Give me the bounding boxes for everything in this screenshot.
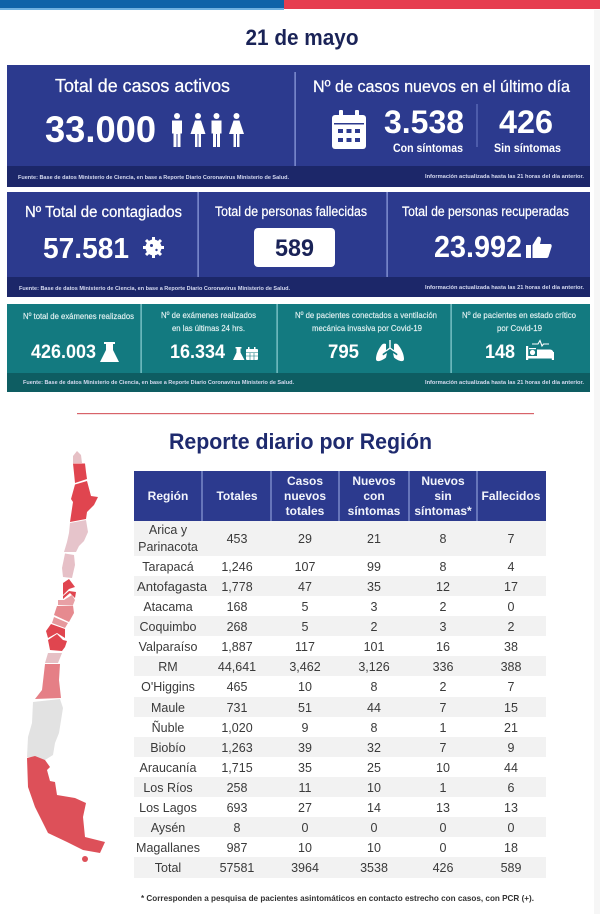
icon: people — [172, 113, 244, 147]
region: Araucania — [48, 634, 67, 651]
row: Maule: 15 — [504, 701, 518, 715]
number: examenes 24 hrs: 16.334 — [170, 342, 225, 363]
number: ventilacion: 795 — [328, 342, 359, 363]
table header: Región — [148, 489, 188, 503]
label: sin sintomas: Sin síntomas — [494, 141, 561, 155]
row: Magallanes: 0 — [440, 841, 447, 855]
row: Valparaiso: 1,887 — [221, 640, 253, 654]
row: Arica y Parinacota — [138, 523, 515, 554]
table header: nuevos — [284, 489, 326, 503]
icon: lungs — [376, 340, 404, 361]
row: Tarapaca: Tarapacá — [142, 560, 194, 574]
region: Coquimbo — [62, 554, 75, 578]
panel: examenes y pacientes — [7, 304, 590, 392]
top bar — [0, 0, 600, 10]
row: Magallanes — [136, 841, 518, 855]
label: ventilacion: Nº de pacientes conectados a ventilación — [295, 310, 437, 320]
row: O'Higgins: 8 — [371, 680, 378, 694]
row: Los Lagos — [139, 801, 518, 815]
row: Maule: 51 — [298, 701, 312, 715]
row: Araucania — [140, 761, 518, 775]
panel: casos activos y nuevos — [7, 65, 590, 187]
row: Antofagasta: 17 — [504, 580, 518, 594]
row: Biobio: 1,263 — [221, 741, 253, 755]
row: Araucania: 44 — [504, 761, 518, 775]
region: RM — [63, 591, 76, 599]
row: Araucania: 25 — [367, 761, 381, 775]
icon: small flask — [233, 347, 244, 360]
number: total examenes: 426.003 — [31, 342, 96, 363]
row: RM: 44,641 — [218, 660, 256, 674]
row: RM: 3,126 — [358, 660, 390, 674]
row: Los Lagos: 14 — [367, 801, 381, 815]
row: Arica y Parinacota: 453 — [227, 532, 247, 546]
row: O'Higgins: 10 — [298, 680, 312, 694]
row: Total: 426 — [433, 861, 453, 875]
row: Aysen — [151, 821, 515, 835]
row: RM: 336 — [433, 660, 453, 674]
source note: Fuente: Base de datos Ministerio de Ciencia, en base a Reporte Diario Coronavirus Ministerio de Salud. — [18, 175, 289, 181]
row: Los Lagos: 13 — [504, 801, 518, 815]
region: Atacama — [64, 520, 88, 552]
row: Tarapaca — [142, 560, 515, 574]
row: Valparaiso: 101 — [364, 640, 384, 654]
number: con sintomas: 3.538 — [384, 104, 464, 140]
table header — [134, 471, 546, 521]
footnote: * Corresponden a pesquisa de pacientes asintomáticos en contacto estrecho con casos, con PCR (+). — [141, 893, 534, 903]
row: Tarapaca: 8 — [440, 560, 447, 574]
number box: fallecidas — [254, 228, 335, 267]
row: Los Lagos: Los Lagos — [139, 801, 197, 815]
row: RM: 388 — [501, 660, 521, 674]
row: O'Higgins: O'Higgins — [141, 680, 195, 694]
row: O'Higgins: 7 — [508, 680, 515, 694]
row: Nuble: 21 — [504, 721, 518, 735]
label: con sintomas: Con síntomas — [393, 141, 463, 155]
row: Tarapaca: 4 — [508, 560, 515, 574]
update note: Información actualizada hasta las 21 horas del día anterior. — [425, 285, 584, 291]
row: RM: 3,462 — [289, 660, 321, 674]
row: Magallanes: 18 — [504, 841, 518, 855]
row: Antofagasta: Antofagasta — [137, 580, 207, 594]
row: Arica y Parinacota: 21 — [367, 532, 381, 546]
region: Los Lagos — [35, 664, 61, 699]
row: Araucania: 1,715 — [221, 761, 253, 775]
table header: síntomas — [348, 504, 401, 518]
update note: Información actualizada hasta las 21 horas del día anterior. — [425, 380, 584, 386]
table header: Fallecidos — [482, 489, 541, 503]
row: Arica y Parinacota: Arica y — [149, 523, 188, 537]
row: Coquimbo — [140, 620, 515, 634]
region: Los Rios — [45, 653, 62, 663]
row: Valparaiso — [139, 640, 518, 654]
region: Nuble — [52, 617, 68, 628]
row: Coquimbo: 268 — [227, 620, 247, 634]
row: Maule: 731 — [227, 701, 247, 715]
row: RM — [158, 660, 521, 674]
row: Antofagasta: 47 — [298, 580, 312, 594]
row: Aysen: 0 — [302, 821, 309, 835]
label: estado critico: por Covid-19 — [497, 323, 542, 333]
row: Nuble: Ñuble — [152, 721, 184, 735]
row: Maule — [151, 701, 518, 715]
table header: síntomas* — [414, 504, 472, 518]
icon: virus — [143, 237, 164, 258]
row: O'Higgins: 465 — [227, 680, 247, 694]
row: Coquimbo: Coquimbo — [140, 620, 197, 634]
region: Magallanes — [27, 756, 105, 853]
row: Magallanes: 10 — [367, 841, 381, 855]
row: RM: RM — [158, 660, 178, 674]
icon: thumbs up — [526, 237, 552, 258]
table header: totales — [286, 504, 325, 518]
row: Antofagasta: 12 — [436, 580, 450, 594]
row: Biobio: Biobío — [150, 741, 186, 755]
region: Maule — [54, 606, 74, 622]
row: Total: 57581 — [220, 861, 254, 875]
heading: recuperadas: Total de personas recuperadas — [402, 204, 569, 219]
row: Total: 3538 — [360, 861, 388, 875]
label: examenes 24 hrs: Nº de exámenes realizados — [161, 310, 256, 320]
row: Biobio: 7 — [440, 741, 447, 755]
number: contagiados: 57.581 — [43, 233, 129, 265]
region: Antofagasta — [70, 481, 98, 522]
row: Aysen: 0 — [508, 821, 515, 835]
row: Tarapaca: 99 — [367, 560, 381, 574]
row: Los Rios — [143, 781, 515, 795]
table header: sin — [434, 489, 452, 503]
row: Biobio — [150, 741, 515, 755]
row: Arica y Parinacota: Parinacota — [138, 540, 198, 554]
table header: Casos — [287, 474, 323, 488]
row: Nuble — [152, 721, 518, 735]
row: Total: 589 — [501, 861, 521, 875]
row: Los Rios: 6 — [508, 781, 515, 795]
region: Aysen — [27, 699, 63, 760]
label: ventilacion: mecánica invasiva por Covid-19 — [312, 323, 422, 333]
row: Tarapaca: 107 — [295, 560, 315, 574]
source note: Fuente: Base de datos Ministerio de Ciencia, en base a Reporte Diario Coronavirus Ministerio de Salud. — [23, 380, 294, 386]
icon: hospital bed — [526, 340, 554, 360]
row: Coquimbo: 2 — [508, 620, 515, 634]
source note: Fuente: Base de datos Ministerio de Ciencia, en base a Reporte Diario Coronavirus Ministerio de Salud. — [19, 286, 290, 292]
icon: calendar — [332, 110, 366, 149]
row: Nuble: 1 — [440, 721, 447, 735]
row: Los Rios: 10 — [367, 781, 381, 795]
row: Magallanes: 10 — [298, 841, 312, 855]
row: Atacama — [143, 600, 515, 614]
row: Atacama: 168 — [227, 600, 247, 614]
row: Valparaiso: Valparaíso — [139, 640, 197, 654]
heading: reporte diario: Reporte diario por Región — [169, 429, 432, 454]
row: Arica y Parinacota: 29 — [298, 532, 312, 546]
row: Los Rios: Los Ríos — [143, 781, 193, 795]
row: Tarapaca: 1,246 — [221, 560, 253, 574]
table header: Nuevos — [352, 474, 396, 488]
row: Biobio: 9 — [508, 741, 515, 755]
label: estado critico — [462, 310, 576, 333]
row: Antofagasta — [137, 580, 518, 594]
region: O'Higgins — [58, 595, 75, 605]
table header: con — [363, 489, 385, 503]
heading: casos nuevos: Nº de casos nuevos en el último día — [313, 77, 571, 96]
row: Coquimbo: 5 — [302, 620, 309, 634]
row: Los Lagos: 13 — [436, 801, 450, 815]
label: examenes 24 hrs: en las últimas 24 hrs. — [172, 323, 245, 333]
row: Arica y Parinacota: 7 — [508, 532, 515, 546]
row: Araucania: 10 — [436, 761, 450, 775]
row: Coquimbo: 2 — [371, 620, 378, 634]
region: Arica — [73, 451, 82, 463]
label: estado critico: Nº de pacientes en estado crítico — [462, 310, 576, 320]
row: Los Rios: 11 — [299, 781, 312, 795]
row: Total: Total — [155, 861, 181, 875]
number: sin sintomas: 426 — [499, 104, 553, 140]
row: Maule: 7 — [440, 701, 447, 715]
region: Valparaiso — [63, 579, 75, 595]
table header: Nuevos — [421, 474, 465, 488]
panel: totales — [7, 192, 590, 297]
region: Antartica dot — [82, 856, 88, 862]
heading: contagiados: Nº Total de contagiados — [25, 204, 182, 221]
row: Coquimbo: 3 — [440, 620, 447, 634]
number: estado critico: 148 — [485, 342, 515, 363]
label: ventilacion — [295, 310, 437, 333]
row: Antofagasta: 35 — [367, 580, 381, 594]
row: Araucania: 35 — [298, 761, 312, 775]
table header: Totales — [216, 489, 258, 503]
map of Chile — [27, 451, 105, 862]
region: Biobio — [46, 624, 65, 638]
row: Atacama: 3 — [371, 600, 378, 614]
table: reporte por region — [134, 471, 546, 878]
row stripes — [134, 521, 546, 878]
row: Arica y Parinacota: 8 — [440, 532, 447, 546]
row: Aysen: 0 — [440, 821, 447, 835]
row: Atacama: 5 — [302, 600, 309, 614]
title: 21 de mayo — [246, 25, 358, 50]
region: Tarapaca — [73, 464, 87, 483]
row: Nuble: 9 — [302, 721, 309, 735]
update note: Información actualizada hasta las 21 horas del día anterior. — [425, 174, 584, 180]
row: Nuble: 8 — [371, 721, 378, 735]
row: Araucania: Araucanía — [140, 761, 197, 775]
label: examenes 24 hrs — [161, 310, 256, 333]
heading: total de casos activos: Total de casos activos — [55, 76, 230, 96]
row: Nuble: 1,020 — [221, 721, 253, 735]
row: Los Rios: 258 — [227, 781, 247, 795]
row: Aysen: 0 — [371, 821, 378, 835]
row: O'Higgins: 2 — [440, 680, 447, 694]
row: Los Lagos: 693 — [227, 801, 247, 815]
number: recuperadas: 23.992 — [434, 229, 522, 264]
label: total examenes: Nº total de exámenes realizados — [23, 311, 134, 321]
row: Magallanes: Magallanes — [136, 841, 200, 855]
number: casos activos: 33.000 — [45, 109, 156, 150]
icon: small calendar — [246, 347, 258, 360]
row: Total — [155, 861, 521, 875]
number box: fallecidas: 589 — [275, 235, 314, 262]
row: Aysen: Aysén — [151, 821, 185, 835]
row: Magallanes: 987 — [227, 841, 247, 855]
row: Biobio: 32 — [367, 741, 381, 755]
row: Atacama: 2 — [440, 600, 447, 614]
row: Maule: Maule — [151, 701, 185, 715]
row: Biobio: 39 — [298, 741, 312, 755]
row: Total: 3964 — [291, 861, 319, 875]
row: Maule: 44 — [367, 701, 381, 715]
row: Los Rios: 1 — [440, 781, 447, 795]
row: Aysen: 8 — [234, 821, 241, 835]
heading: fallecidas: Total de personas fallecidas — [215, 204, 367, 219]
icon: flask — [100, 342, 119, 362]
row: Valparaiso: 38 — [504, 640, 518, 654]
row: Valparaiso: 16 — [436, 640, 450, 654]
row: Atacama: Atacama — [143, 600, 193, 614]
row: Valparaiso: 117 — [295, 640, 315, 654]
row: Los Lagos: 27 — [298, 801, 312, 815]
row: Antofagasta: 1,778 — [221, 580, 253, 594]
row: Atacama: 0 — [508, 600, 515, 614]
row: O'Higgins — [141, 680, 515, 694]
